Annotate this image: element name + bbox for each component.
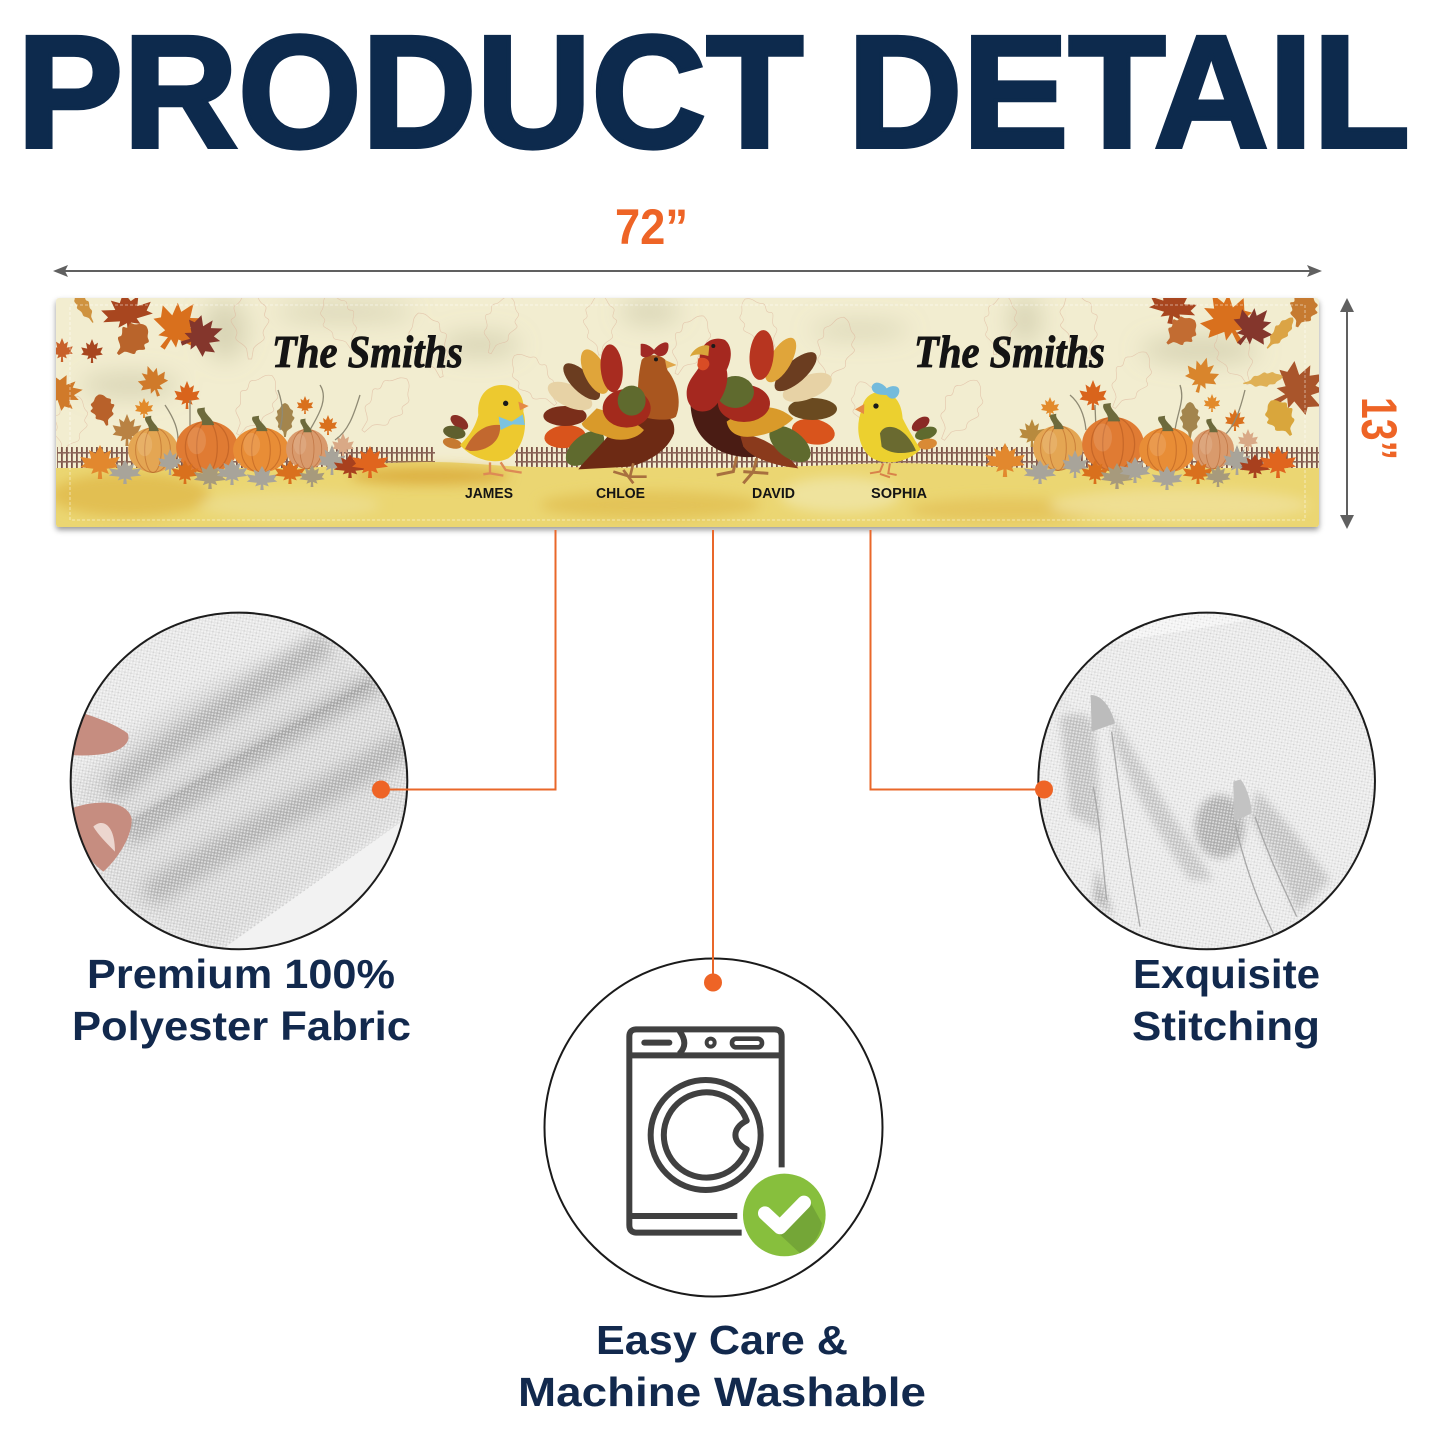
icon: washing machine with check <box>629 1029 828 1259</box>
left pumpkins and foliage <box>42 288 388 490</box>
name: David: DAVID <box>752 486 795 502</box>
label: easy care: Machine Washable <box>518 1369 926 1415</box>
stitching <box>70 305 1305 520</box>
chick: James <box>442 385 529 476</box>
right pumpkins and foliage <box>985 298 1319 490</box>
arrow: width dimension <box>53 265 1322 277</box>
circle: stitching close-up <box>1037 612 1376 950</box>
label: exquisite stitching <box>1132 951 1320 1049</box>
label: easy care <box>518 1317 926 1415</box>
arrow: height dimension <box>1340 298 1354 529</box>
label: polyester fabric: Polyester Fabric <box>72 1003 411 1049</box>
ground <box>50 462 1319 527</box>
family name left: The Smiths <box>272 326 463 377</box>
connector line: center <box>704 530 722 992</box>
family name right: The Smiths <box>914 326 1105 377</box>
table runner product image <box>42 281 1338 527</box>
width label: 72 inches: 72” <box>615 199 688 255</box>
circle: washing care <box>544 958 882 1296</box>
circle: fabric close-up <box>70 612 408 950</box>
label: polyester fabric: Premium 100% <box>87 951 395 997</box>
connector line: right <box>870 530 1053 798</box>
name: Sophia: SOPHIA <box>871 486 928 502</box>
chick: Sophia <box>855 383 939 477</box>
label: easy care: Easy Care & <box>596 1317 848 1363</box>
label: exquisite stitching: Exquisite <box>1133 951 1320 997</box>
height label: 13 inches: 13” <box>1351 397 1407 460</box>
label: polyester fabric <box>72 951 411 1049</box>
fence <box>57 447 1319 469</box>
name: Chloe: CHLOE <box>596 486 645 502</box>
connector line: left <box>372 530 556 798</box>
fabric fold shadows <box>80 296 1260 397</box>
name: James: JAMES <box>465 486 513 502</box>
turkey: Chloe <box>543 342 679 483</box>
faint leaf outlines <box>46 287 1265 458</box>
title: PRODUCT DETAIL <box>17 2 1410 181</box>
turkey: David <box>687 329 837 483</box>
label: exquisite stitching: Stitching <box>1132 1003 1320 1049</box>
